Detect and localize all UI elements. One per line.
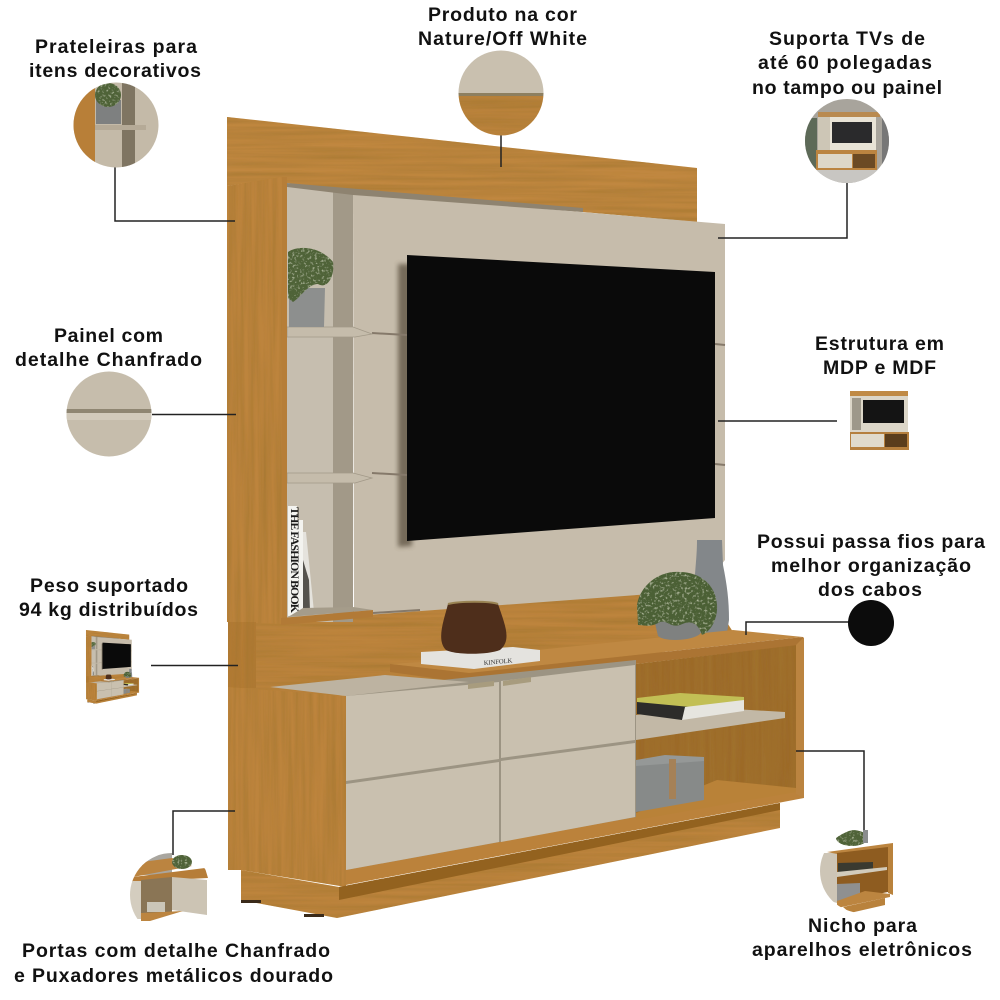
counter front edge — [390, 637, 803, 683]
icon: door close-up — [130, 852, 208, 921]
panel grooves — [372, 333, 725, 613]
book spine title: THE FASHION BOOK — [288, 507, 302, 614]
shelf upper — [287, 327, 372, 337]
books in niche — [288, 506, 314, 616]
icon: weight thumbnail — [86, 630, 139, 704]
glass vase — [441, 602, 506, 654]
lower back plate — [228, 580, 733, 696]
label: weight: Peso suportado — [30, 575, 188, 597]
label: doors: e Puxadores metálicos dourado — [14, 965, 333, 987]
door top-left — [346, 682, 499, 781]
line: colour — [500, 135, 502, 167]
line: TV size — [718, 183, 847, 238]
magazines — [637, 693, 744, 720]
plant — [836, 830, 864, 846]
plinth — [241, 803, 780, 918]
left door — [130, 881, 141, 919]
TV shadow — [398, 264, 412, 547]
TV screen — [407, 255, 715, 541]
icon: room scene — [805, 99, 889, 184]
foliage — [288, 248, 333, 302]
open door — [172, 877, 207, 915]
door gap backing — [346, 660, 636, 876]
foliage — [637, 572, 717, 635]
floor — [837, 891, 890, 908]
door top-right — [501, 665, 635, 758]
vase body — [441, 602, 506, 654]
label: shelves: Prateleiras para — [35, 36, 197, 58]
line: doors — [173, 811, 235, 855]
label: doors: Portas com detalhe Chanfrado — [22, 940, 330, 962]
interior — [141, 877, 172, 913]
label: weight: 94 kg distribuídos — [19, 599, 198, 621]
interior — [837, 847, 888, 902]
vase ceramic tall — [694, 540, 729, 637]
book on counter — [421, 647, 540, 669]
tower lower shelf — [288, 607, 373, 617]
line: shelves — [115, 167, 235, 221]
beige back panel — [353, 193, 725, 616]
door handle left — [468, 681, 494, 689]
label: niche: aparelhos eletrônicos — [752, 939, 972, 961]
counter top — [390, 630, 803, 673]
plinth — [843, 898, 885, 913]
door bottom-left — [346, 762, 499, 870]
line: niche — [796, 751, 864, 830]
label: structure: MDP e MDF — [823, 357, 936, 379]
lower rail — [346, 790, 804, 885]
book cover — [421, 647, 540, 669]
label: cable pass: Possui passa fios para — [757, 531, 985, 553]
magazine stack right — [682, 700, 744, 720]
side — [888, 843, 893, 895]
icon: cable hole — [848, 600, 894, 646]
feet — [241, 900, 261, 903]
tower side — [227, 177, 282, 624]
tower inner edge — [282, 177, 287, 624]
plant — [172, 855, 192, 869]
niche floor — [636, 780, 796, 820]
book white — [288, 506, 303, 616]
label: shelves: itens decorativos — [29, 60, 201, 82]
wall — [142, 852, 172, 875]
label: cable pass: melhor organização — [771, 555, 971, 577]
icon: colour swatch — [458, 50, 544, 136]
label: cable pass: dos cabos — [818, 579, 922, 601]
line: chamfer — [152, 414, 236, 416]
connector lines — [115, 135, 864, 855]
box — [147, 902, 165, 912]
label: structure: Estrutura em — [815, 333, 944, 355]
pot — [653, 615, 703, 640]
gray box — [636, 755, 704, 812]
vase rim — [448, 602, 498, 604]
box — [837, 883, 860, 901]
label: colour: Produto na cor — [428, 4, 577, 26]
shelf niche back — [287, 184, 353, 622]
furniture: TV panel with sideboard — [227, 117, 804, 918]
beige shelf — [636, 707, 785, 740]
back wood — [133, 858, 192, 877]
line: structure — [718, 420, 837, 422]
label: chamfer: Painel com — [54, 325, 163, 347]
door bottom-right — [501, 743, 635, 842]
magazine top — [637, 693, 744, 708]
icon: structure thumbnail — [850, 391, 909, 450]
books — [838, 862, 873, 873]
label: TV size: no tampo ou painel — [752, 77, 942, 99]
plinth recess — [339, 803, 780, 900]
shelf — [837, 867, 887, 877]
top — [827, 843, 893, 854]
box lid — [636, 755, 704, 768]
door — [820, 853, 837, 903]
label: colour: Nature/Off White — [418, 28, 587, 50]
tower shadow column — [228, 622, 256, 688]
shelf lower — [287, 473, 372, 483]
shadow under wood panel — [287, 183, 583, 212]
beige top surface — [270, 675, 469, 696]
icon: shelf close-up — [73, 82, 159, 168]
sideboard left side — [228, 687, 346, 887]
bottom — [141, 911, 183, 921]
label: niche: Nicho para — [808, 915, 917, 937]
potted plant in niche — [288, 248, 333, 327]
icon: niche close-up — [820, 830, 893, 913]
niche dark divider — [333, 190, 353, 622]
pot — [289, 288, 325, 327]
line: cable — [746, 622, 850, 635]
niche interior — [636, 645, 798, 813]
box strap — [669, 759, 676, 799]
plant on counter — [637, 572, 717, 640]
label: TV size: Suporta TVs de — [769, 28, 925, 50]
top wood panel — [227, 117, 697, 222]
line: weight — [151, 664, 238, 666]
box front — [636, 761, 704, 812]
niche right side — [796, 637, 804, 798]
book thin — [303, 532, 314, 615]
door handle right — [503, 677, 531, 686]
book title: KINFOLK — [484, 658, 513, 667]
label: TV size: até 60 polegadas — [758, 52, 932, 74]
counter — [130, 868, 208, 882]
magazine stack left — [637, 702, 690, 720]
icon: chamfer close-up — [66, 371, 152, 457]
label: chamfer: detalhe Chanfrado — [15, 349, 202, 371]
